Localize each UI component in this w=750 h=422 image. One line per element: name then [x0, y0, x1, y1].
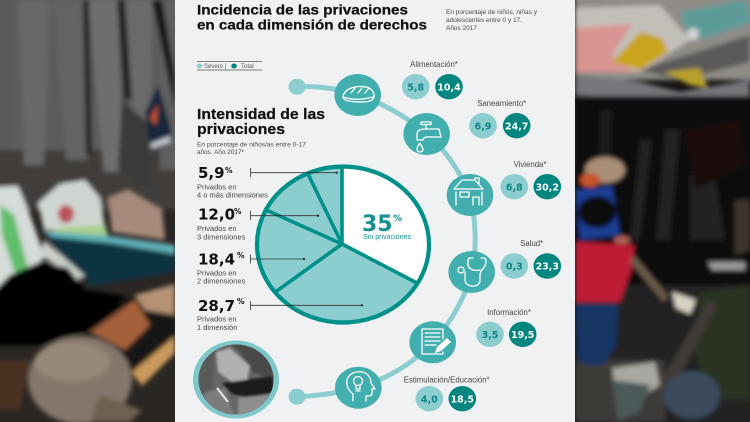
- value group: Salud: Salud*: [520, 239, 543, 248]
- stat: 5,9%: [197, 164, 338, 200]
- value group: Información: [476, 308, 536, 347]
- heading: intensity: privaciones: [197, 121, 285, 138]
- icon: head with light bulb: [335, 367, 382, 409]
- pie chart: [257, 166, 429, 322]
- title: en cada dimensión de derechos: [197, 16, 427, 32]
- value group: Salud: 0,3: [506, 262, 523, 273]
- circular photo: child: [193, 340, 280, 418]
- value group: Vivienda: [500, 160, 561, 199]
- subtitle: incidence: adolescentes entre 0 y 17.: [446, 17, 522, 24]
- legend: Severo |: [204, 64, 227, 70]
- icon: document with pencil: [409, 321, 456, 363]
- value group: Saneamiento: 6,9: [475, 121, 491, 132]
- value group: Estimulación/Educación: Estimulación/Educación*: [404, 376, 490, 384]
- stat: 28,7%: [197, 297, 363, 332]
- stat: 12,0%: Privados en: [197, 224, 237, 233]
- stat: 12,0%: [197, 206, 319, 242]
- stat: 28,7%: Privados en: [197, 314, 237, 324]
- pie label: 35%: Sin privaciones: [363, 234, 412, 241]
- value group: Alimentación: 5,8: [407, 82, 424, 93]
- icon: water tap: [403, 113, 450, 155]
- heading: intensity: Intensidad de las: [197, 106, 325, 123]
- value group: Información: 3,5: [482, 330, 498, 341]
- icon: house: [447, 174, 493, 216]
- stat: 28,7%: %: [237, 297, 245, 306]
- legend: [197, 62, 262, 70]
- value group: Alimentación: 10,4: [437, 82, 461, 93]
- stat: 28,7%: 28,7: [198, 297, 235, 315]
- stat: 18,4%: 2 dimensiones: [197, 276, 246, 286]
- pie label: 35%: [362, 212, 412, 241]
- value group: Información: 19,5: [511, 330, 534, 341]
- value group: Estimulación/Educación: 4,0: [421, 394, 438, 405]
- value group: Vivienda: 30,2: [536, 182, 559, 193]
- stat: 5,9%: %: [225, 166, 233, 175]
- timeline arc: [288, 79, 475, 405]
- stat: 18,4%: Privados en: [197, 268, 237, 278]
- heading: intensity: [197, 106, 325, 138]
- subtitle: incidence: [446, 9, 538, 32]
- pie label: 35%: 35: [362, 212, 393, 237]
- value group: Salud: [500, 239, 561, 279]
- value group: Información: Información*: [487, 308, 531, 317]
- stat: 12,0%: 12,0: [198, 206, 235, 224]
- right background photo: children and shack: [575, 0, 750, 422]
- left background photo: wheelbarrow and wooden wall: [0, 0, 180, 422]
- stat: 18,4%: 18,4: [198, 250, 235, 268]
- subtitle: intensity: años. Año 2017*: [197, 149, 244, 156]
- value group: Estimulación/Educación: [404, 376, 490, 411]
- subtitle: intensity: En porcentaje de niños/as entre 0-17: [197, 142, 306, 148]
- stat: 12,0%: %: [234, 207, 242, 216]
- value group: Saneamiento: [469, 99, 530, 138]
- icon: stethoscope: [448, 251, 495, 293]
- value group: Alimentación: [402, 60, 463, 99]
- value group: Salud: 23,3: [536, 262, 559, 273]
- value group: Vivienda: 6,8: [506, 182, 523, 193]
- stat: 18,4%: %: [237, 251, 245, 260]
- value group: Alimentación: Alimentación*: [410, 60, 458, 69]
- stat: 5,9%: 5,9: [198, 164, 225, 182]
- value group: Vivienda: Vivienda*: [514, 160, 546, 169]
- stat: 5,9%: 4 o más dimensiones: [197, 190, 268, 200]
- value group: Saneamiento: Saneamiento*: [477, 99, 526, 108]
- subtitle: incidence: En porcentaje de niños, niñas y: [446, 9, 538, 16]
- legend: Total: [241, 64, 254, 70]
- stat: 28,7%: 1 dimensión: [197, 323, 237, 332]
- pie label: 35%: %: [393, 214, 402, 224]
- stat: 12,0%: 3 dimensiones: [197, 232, 246, 242]
- title: Incidencia de las privaciones: [197, 2, 408, 18]
- icon: bread: [334, 74, 381, 116]
- value group: Estimulación/Educación: 18,5: [451, 394, 474, 405]
- main white panel: [175, 0, 575, 422]
- subtitle: intensity: [197, 142, 306, 156]
- title: [197, 2, 427, 32]
- stat: 18,4%: [197, 250, 305, 286]
- subtitle: incidence: Años 2017: [446, 25, 477, 32]
- stat: 5,9%: Privados en: [197, 182, 237, 192]
- value group: Saneamiento: 24,7: [505, 121, 528, 132]
